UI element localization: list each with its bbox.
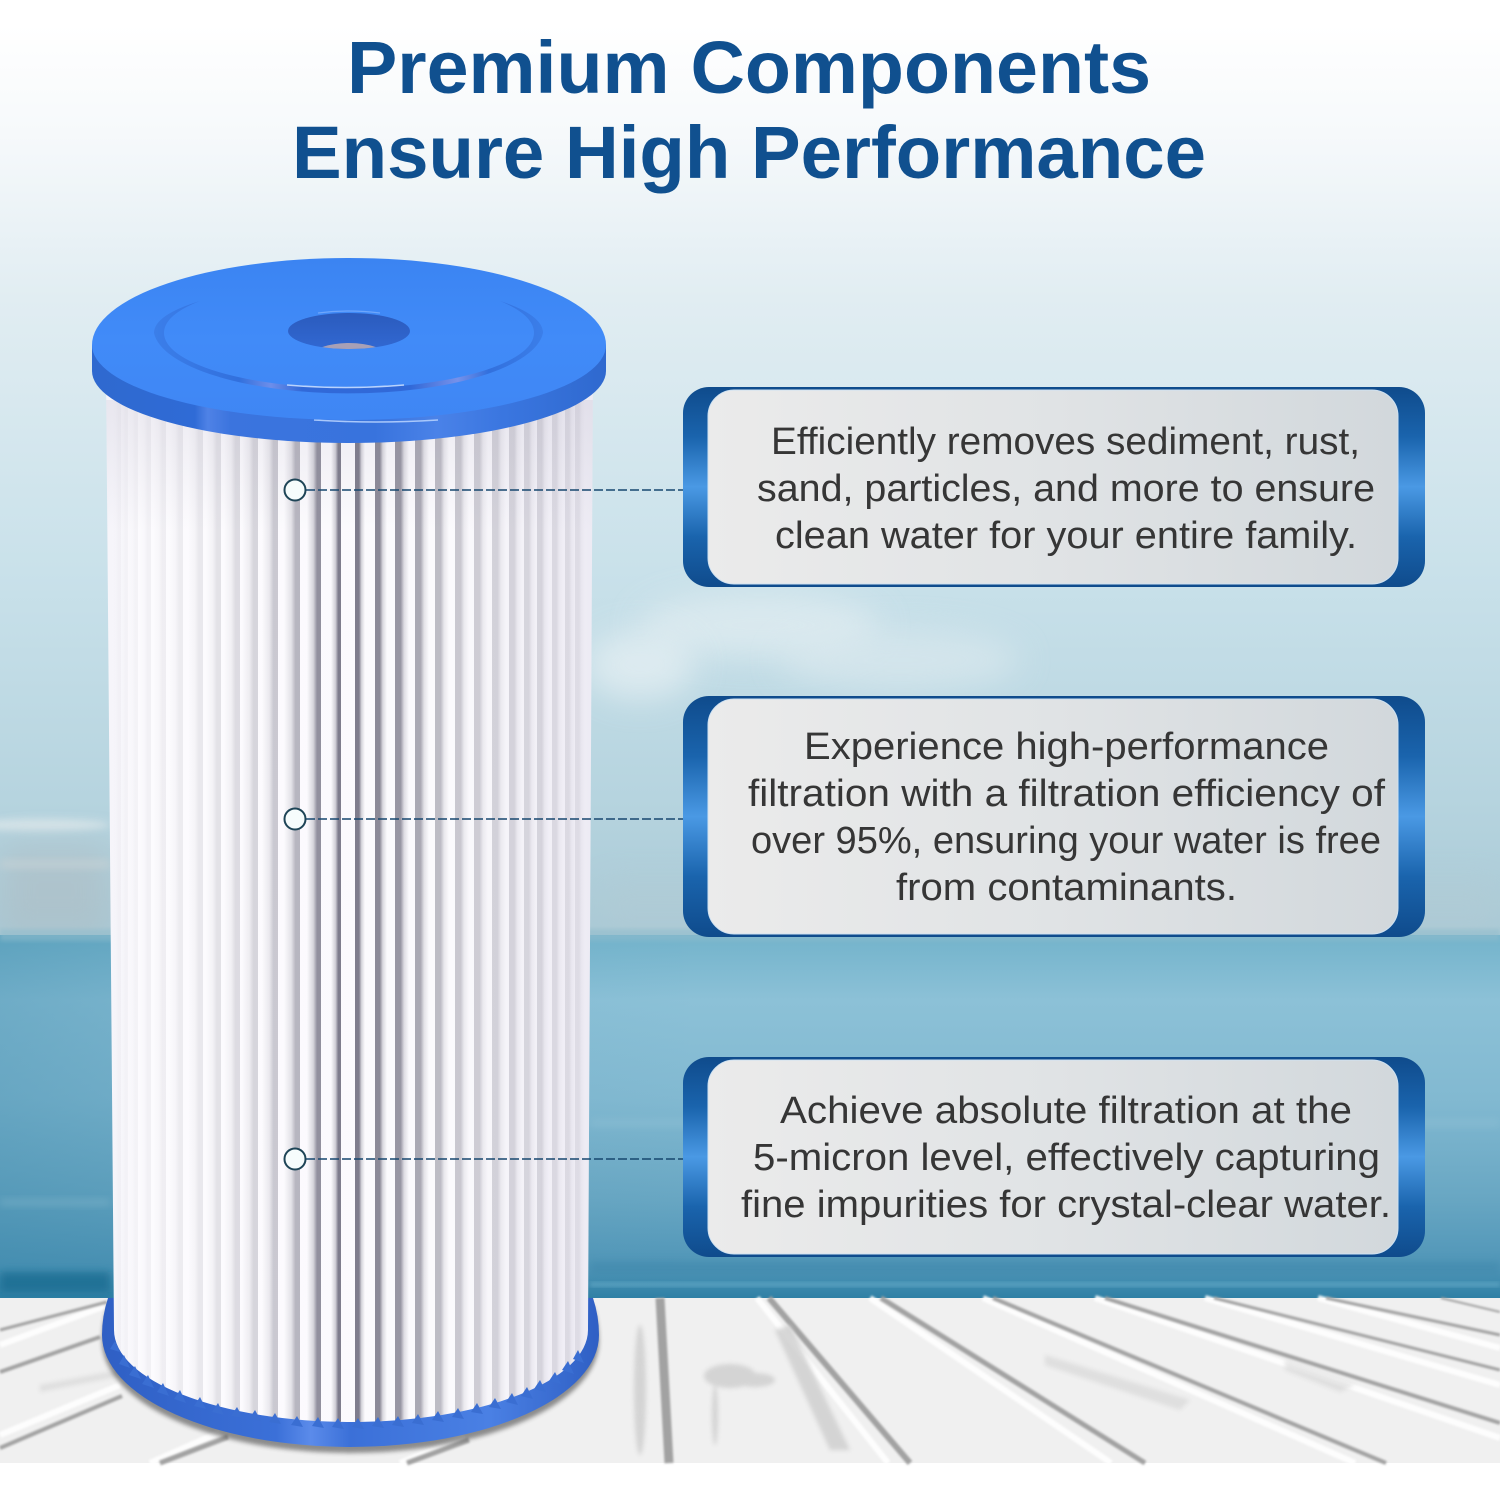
text: filtration efficiency: from contaminants. [896, 867, 1237, 909]
filter cartridge product illustration [92, 258, 606, 1453]
text: 5-micron filtration [741, 1090, 1391, 1226]
deck stains [40, 1325, 1355, 1455]
top end cap: centre hole [288, 310, 410, 349]
clouds [0, 593, 1500, 935]
text: filtration efficiency: Experience high-performance [804, 726, 1329, 768]
text: sediment removal [757, 421, 1375, 557]
title [292, 26, 1206, 194]
title: Premium Components [347, 26, 1151, 109]
title: Ensure High Performance [292, 111, 1206, 194]
panel: filtration efficiency [683, 696, 1425, 937]
text: filtration efficiency: filtration with a filtration efficiency of [748, 773, 1385, 815]
callout connector 3 [284, 1148, 683, 1170]
bottom end cap [102, 1298, 599, 1453]
top end cap: raised inner ring [154, 301, 543, 393]
text: 5-micron filtration: fine impurities for crystal-clear water. [741, 1184, 1391, 1226]
top end cap: top surface [92, 258, 606, 420]
callout connector 1 [284, 480, 683, 500]
text: 5-micron filtration: 5-micron level, effectively capturing [753, 1137, 1380, 1179]
pleat bottom notches [110, 1341, 584, 1429]
pleated filter body [100, 360, 600, 1450]
text: filtration efficiency: over 95%, ensuring your water is free [751, 820, 1381, 862]
deck planks [0, 1298, 1500, 1463]
text: sediment removal: clean water for your entire family. [775, 515, 1357, 557]
text: sediment removal: sand, particles, and more to ensure [757, 468, 1375, 510]
panel: sediment removal [683, 387, 1425, 587]
top end cap: rim side [92, 345, 606, 443]
panel: 5-micron filtration [683, 1057, 1425, 1257]
sea streaks [0, 929, 1500, 1298]
text: sediment removal: Efficiently removes sediment, rust, [771, 421, 1360, 463]
callout connector 2 [284, 808, 683, 830]
text: 5-micron filtration: Achieve absolute filtration at the [780, 1090, 1352, 1132]
text: filtration efficiency [748, 726, 1385, 909]
